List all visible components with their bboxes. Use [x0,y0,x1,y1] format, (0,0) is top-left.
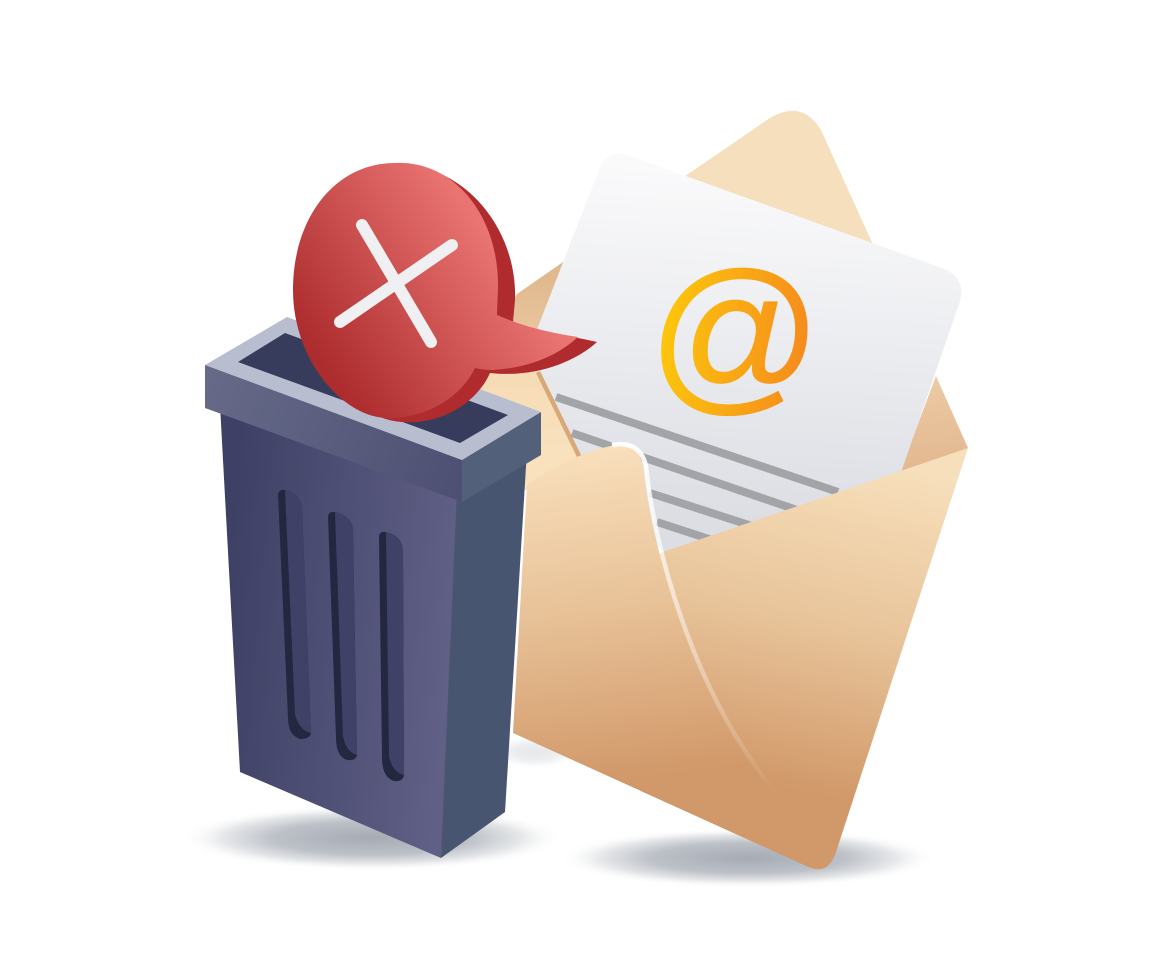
bin lid right [462,412,541,502]
bin opening [238,333,508,443]
bin front [220,405,457,858]
bin lid front [205,365,462,502]
trash bin [205,317,541,858]
x mark [340,225,452,342]
envelope right interior [895,376,968,485]
envelope back flap [640,111,880,260]
envelope [470,111,968,869]
bin slot 3 [379,532,404,781]
bin slot 2 [328,512,357,760]
ground shadow: bin [180,805,564,871]
envelope left interior [470,205,645,490]
bubble face [293,163,578,418]
envelope inner fold edge [538,372,580,458]
bubble depth [368,172,597,422]
ground shadow: envelope edge [490,736,580,768]
at sign: @ [648,238,822,429]
bin right side [441,450,527,858]
rejected speech bubble [293,163,597,422]
bin lid top [205,317,541,460]
bin slot 1 [278,490,311,739]
flap highlight [612,444,778,796]
ground shadow: envelope [558,828,938,888]
letter text lines [556,397,838,540]
letter sheet [531,154,961,560]
envelope right front flap [640,448,968,869]
envelope left front flap [513,445,810,868]
